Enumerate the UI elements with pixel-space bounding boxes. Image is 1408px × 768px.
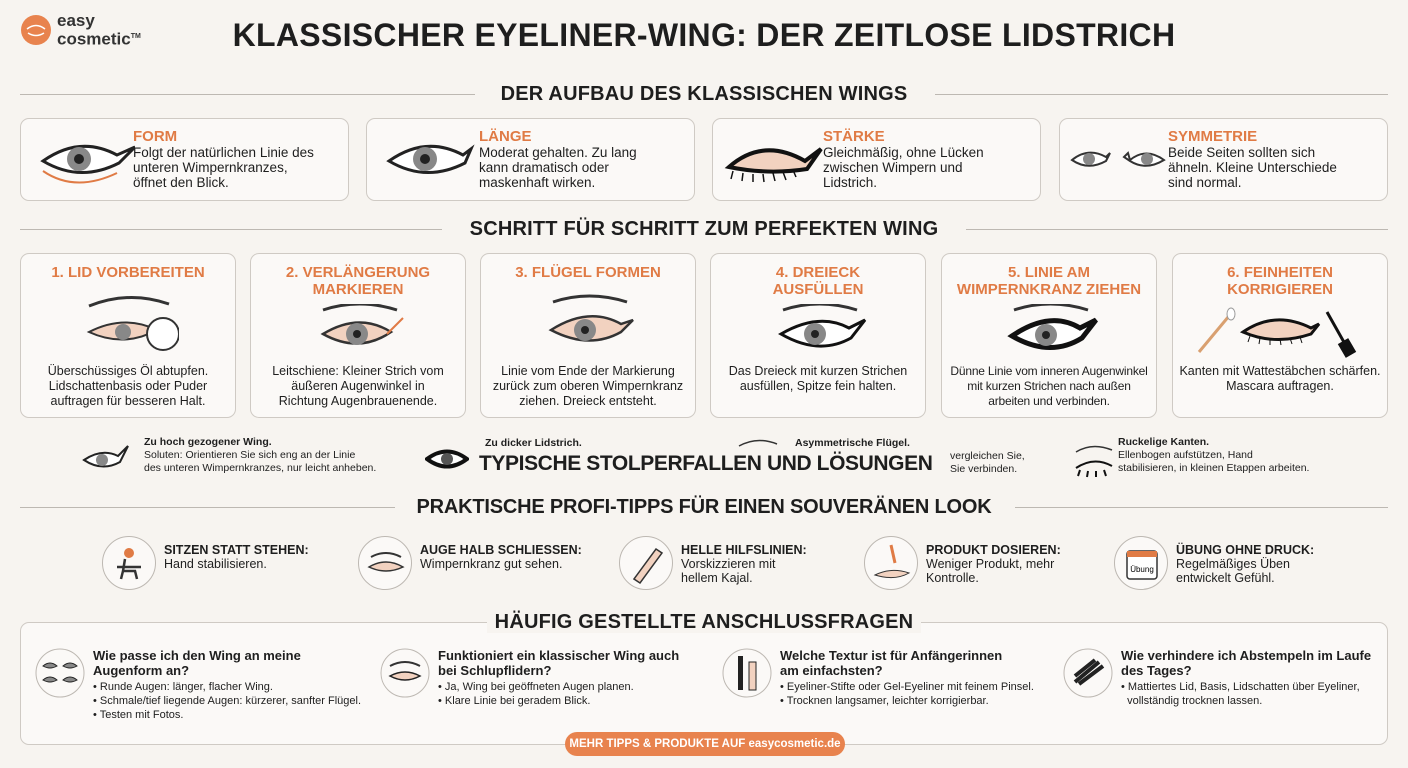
- step 2: äußeren Augenwinkel in: [291, 379, 425, 393]
- tip 5: Übung: [1130, 565, 1154, 574]
- pitfalls row: vergleichen Sie,: [950, 450, 1025, 462]
- faq 2: [380, 648, 679, 707]
- step 3: 3. FLÜGEL FORMEN: [515, 264, 661, 281]
- step 2: 2. VERLÄNGERUNG: [286, 264, 430, 281]
- step 4: [710, 253, 926, 418]
- faq 1: [36, 648, 361, 721]
- faq 2: • Ja, Wing bei geöffneten Augen planen.: [438, 681, 634, 693]
- heading: schritte: SCHRITT FÜR SCHRITT ZUM PERFEKTEN WING: [470, 218, 938, 240]
- logo: cosmeticTM: [57, 30, 141, 49]
- step 3: Linie vom Ende der Markierung: [501, 364, 675, 378]
- faq 1: • Schmale/tief liegende Augen: kürzerer, sanfter Flügel.: [93, 695, 361, 707]
- step 4: 4. DREIECK: [776, 264, 860, 281]
- panel: länge: [366, 118, 695, 201]
- faq 1: Wie passe ich den Wing an meine: [93, 648, 301, 663]
- tip 1: [102, 536, 309, 590]
- pitfall 1: Soluten: Orientieren Sie sich eng an der Linie: [144, 449, 355, 461]
- pitfall 1: des unteren Wimpernkranzes, nur leicht anheben.: [144, 462, 376, 474]
- faq 3: • Trocknen langsamer, leichter korrigierbar.: [780, 695, 989, 707]
- tip 4: Weniger Produkt, mehr: [926, 557, 1054, 571]
- pitfalls row: [82, 436, 1309, 478]
- pitfall 4: [1076, 436, 1309, 478]
- faq 1: Augenform an?: [93, 663, 189, 678]
- panel: form: öffnet den Blick.: [133, 175, 229, 190]
- faq 1: • Runde Augen: länger, flacher Wing.: [93, 681, 273, 693]
- tip 5: Regelmäßiges Üben: [1176, 557, 1290, 571]
- step 2: [250, 253, 466, 418]
- pitfall 1: Zu hoch gezogener Wing.: [144, 436, 272, 448]
- step 2: Leitschiene: Kleiner Strich vom: [272, 364, 444, 378]
- button: cta: MEHR TIPPS & PRODUKTE AUF easycosmetic.de: [569, 738, 841, 750]
- step 1: Lidschattenbasis oder Puder: [49, 379, 207, 393]
- panel: stärke: [712, 118, 1041, 201]
- tip 3: HELLE HILFSLINIEN:: [681, 543, 807, 557]
- step 3: [480, 253, 696, 418]
- panel: länge: Moderat gehalten. Zu lang: [479, 145, 637, 160]
- step 6: KORRIGIEREN: [1227, 281, 1333, 298]
- title: KLASSISCHER EYELINER-WING: DER ZEITLOSE LIDSTRICH: [233, 17, 1175, 53]
- panel: stärke: Lidstrich.: [823, 175, 877, 190]
- pitfall 2 heading: TYPISCHE STOLPERFALLEN UND LÖSUNGEN: [479, 452, 932, 475]
- step 5: arbeiten und verbinden.: [988, 394, 1110, 408]
- step 6: [1172, 253, 1388, 418]
- tip 2: AUGE HALB SCHLIESSEN:: [420, 543, 582, 557]
- tip 5: [1114, 536, 1314, 590]
- tip 4: Kontrolle.: [926, 571, 979, 585]
- step 1: auftragen für besseren Halt.: [51, 394, 205, 408]
- panel: symmetrie: ähneln. Kleine Unterschiede: [1168, 160, 1337, 175]
- tip 1: SITZEN STATT STEHEN:: [164, 543, 309, 557]
- logo: easy: [57, 11, 95, 30]
- panel: stärke: Gleichmäßig, ohne Lücken: [823, 145, 984, 160]
- panel: form: [20, 118, 349, 201]
- faq 4: vollständig trocknen lassen.: [1127, 695, 1262, 707]
- pitfall 2 heading: Zu dicker Lidstrich.: [485, 437, 582, 449]
- step 4: AUSFÜLLEN: [773, 281, 863, 298]
- panel: länge: LÄNGE: [479, 128, 532, 145]
- step 1: [20, 253, 236, 418]
- faq 4: [1064, 648, 1371, 707]
- step 4: Das Dreieck mit kurzen Strichen: [729, 364, 907, 378]
- faq 2: bei Schlupflidern?: [438, 663, 551, 678]
- panel: form: unteren Wimpernkranzes,: [133, 160, 288, 175]
- panel: länge: kann dramatisch oder: [479, 160, 609, 175]
- pitfall 4: Ellenbogen aufstützen, Hand: [1118, 449, 1253, 461]
- panel: symmetrie: Beide Seiten sollten sich: [1168, 145, 1315, 160]
- panel: form: FORM: [133, 128, 177, 145]
- step 6: Kanten mit Wattestäbchen schärfen.: [1179, 364, 1381, 378]
- faq 1: • Testen mit Fotos.: [93, 709, 183, 721]
- tip 4: PRODUKT DOSIEREN:: [926, 543, 1061, 557]
- step 6: 6. FEINHEITEN: [1227, 264, 1333, 281]
- step 2: MARKIEREN: [313, 281, 403, 298]
- tip 2: [358, 536, 582, 590]
- button: cta: [565, 732, 845, 756]
- panel: länge: maskenhaft wirken.: [479, 175, 595, 190]
- logo: [21, 11, 141, 49]
- pitfall 4: Ruckelige Kanten.: [1118, 436, 1209, 448]
- tip 1: Hand stabilisieren.: [164, 557, 267, 571]
- tip 2: Wimpernkranz gut sehen.: [420, 557, 562, 571]
- step 4: ausfüllen, Spitze fein halten.: [740, 379, 896, 393]
- step 5: [941, 253, 1157, 418]
- faq 4: • Mattiertes Lid, Basis, Lidschatten über Eyeliner,: [1121, 681, 1360, 693]
- tip 5: entwickelt Gefühl.: [1176, 571, 1275, 585]
- tip 3: [619, 536, 807, 590]
- faq 3: am einfachsten?: [780, 663, 883, 678]
- heading: tipps: PRAKTISCHE PROFI-TIPPS FÜR EINEN SOUVERÄNEN LOOK: [417, 496, 991, 518]
- panel: form: Folgt der natürlichen Linie des: [133, 145, 314, 160]
- step 5: mit kurzen Strichen nach außen: [967, 379, 1131, 393]
- panel: stärke: STÄRKE: [823, 128, 885, 145]
- step 1: Überschüssiges Öl abtupfen.: [48, 364, 208, 378]
- step 3: ziehen. Dreieck entsteht.: [519, 394, 657, 408]
- step 5: 5. LINIE AM: [1008, 264, 1090, 281]
- heading: aufbau: DER AUFBAU DES KLASSISCHEN WINGS: [501, 83, 907, 105]
- step 5: Dünne Linie vom inneren Augenwinkel: [950, 364, 1148, 378]
- tip 3: Vorskizzieren mit: [681, 557, 775, 571]
- pitfall 2 heading: [425, 437, 932, 475]
- pitfall 4: stabilisieren, in kleinen Etappen arbeiten.: [1118, 462, 1309, 474]
- step 3: zurück zum oberen Wimpernkranz: [493, 379, 683, 393]
- faq 4: des Tages?: [1121, 663, 1192, 678]
- step 2: Richtung Augenbrauenende.: [279, 394, 437, 408]
- pitfall 2 heading: Asymmetrische Flügel.: [795, 437, 910, 449]
- step 6: Mascara auftragen.: [1226, 379, 1334, 393]
- panel: faq: [20, 622, 1388, 745]
- heading: faq: HÄUFIG GESTELLTE ANSCHLUSSFRAGEN: [495, 611, 913, 633]
- panel: symmetrie: [1059, 118, 1388, 201]
- faq 3: [722, 648, 1034, 707]
- faq 4: Wie verhindere ich Abstempeln im Laufe: [1121, 648, 1371, 663]
- faq 2: Funktioniert ein klassischer Wing auch: [438, 648, 679, 663]
- pitfall 1: [82, 436, 376, 474]
- step 1: 1. LID VORBEREITEN: [51, 264, 205, 281]
- step 5: WIMPERNKRANZ ZIEHEN: [957, 281, 1141, 298]
- panel: stärke: zwischen Wimpern und: [823, 160, 963, 175]
- tip 4: [864, 536, 1061, 590]
- faq 3: • Eyeliner-Stifte oder Gel-Eyeliner mit feinem Pinsel.: [780, 681, 1034, 693]
- tip 3: hellem Kajal.: [681, 571, 753, 585]
- panel: symmetrie: SYMMETRIE: [1168, 128, 1257, 145]
- tip 5: ÜBUNG OHNE DRUCK:: [1176, 543, 1314, 557]
- faq 2: • Klare Linie bei geradem Blick.: [438, 695, 590, 707]
- faq 3: Welche Textur ist für Anfängerinnen: [780, 648, 1002, 663]
- panel: symmetrie: sind normal.: [1168, 175, 1242, 190]
- pitfalls row: Sie verbinden.: [950, 463, 1017, 475]
